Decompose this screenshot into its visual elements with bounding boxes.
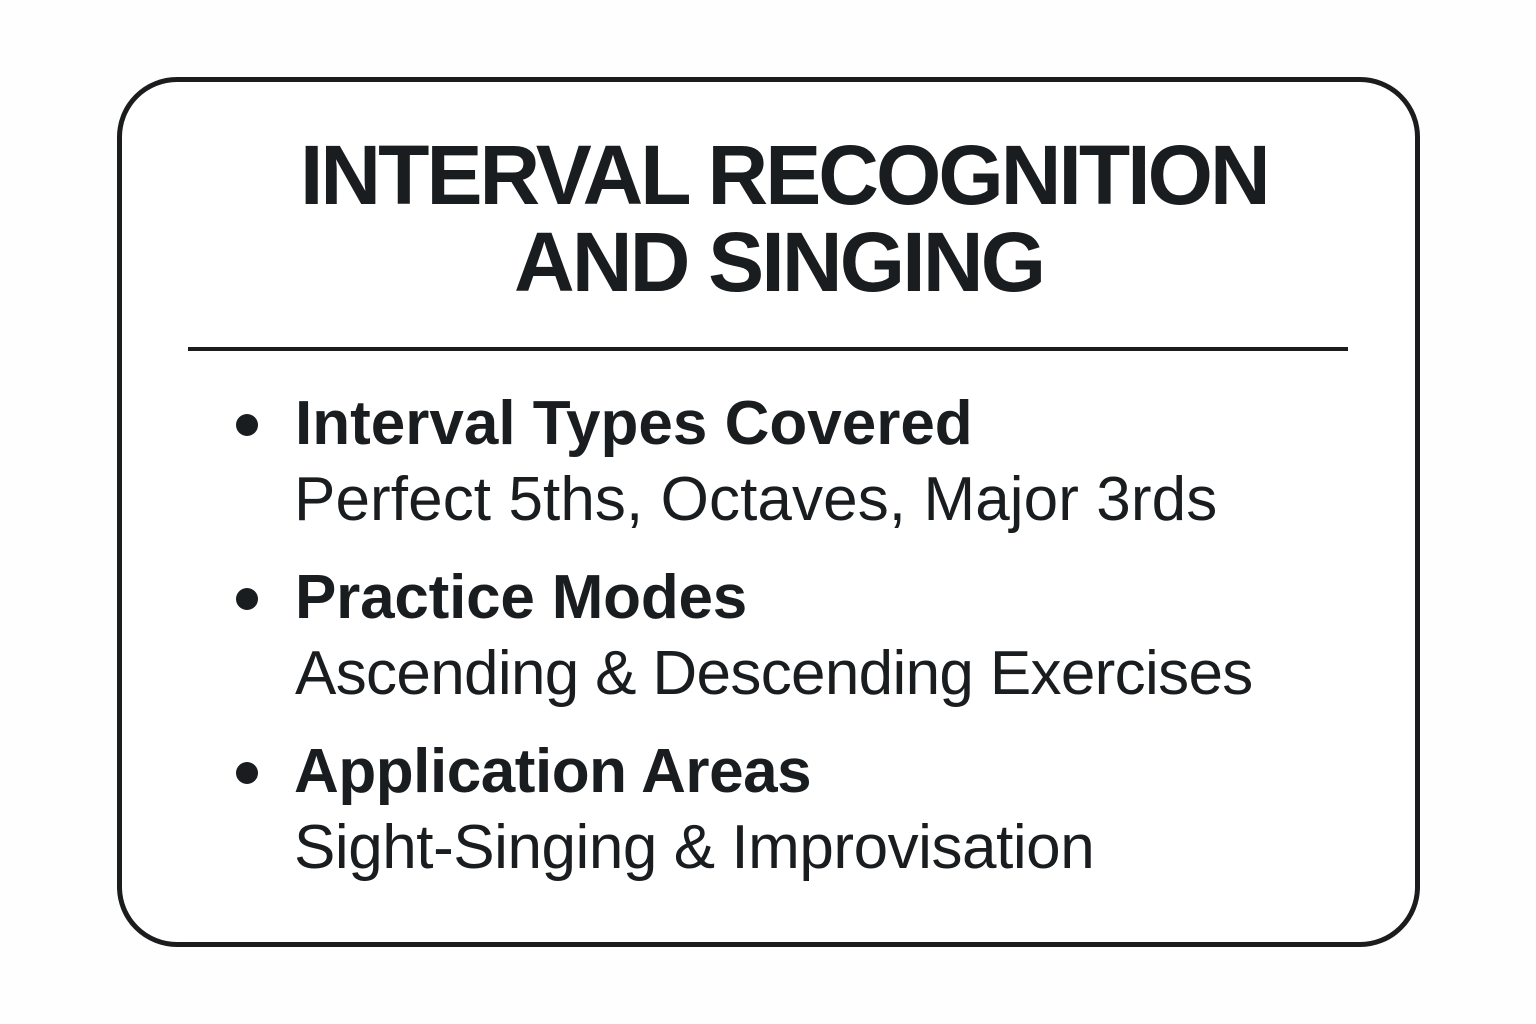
title bbox=[300, 128, 1268, 309]
bullet: interval types bbox=[236, 389, 1217, 534]
heading: practice modes: Practice Modes bbox=[295, 563, 747, 632]
text: interval types: Perfect 5ths, Octaves, Major 3rds bbox=[294, 465, 1217, 534]
bullet: application areas bbox=[236, 737, 1094, 882]
title line 2: AND SINGING bbox=[514, 215, 1043, 309]
text: practice modes: Ascending & Descending Exercises bbox=[295, 639, 1253, 708]
divider bbox=[188, 347, 1348, 351]
panel: main card bbox=[117, 77, 1420, 947]
title line 1: INTERVAL RECOGNITION bbox=[300, 128, 1268, 222]
text: application areas: Sight-Singing & Improvisation bbox=[294, 813, 1094, 882]
heading: interval types covered: Interval Types Covered bbox=[295, 389, 973, 458]
bullet: practice modes bbox=[236, 563, 1253, 708]
icon: bullet dot bbox=[236, 762, 258, 784]
icon: bullet dot bbox=[236, 414, 258, 436]
icon: bullet dot bbox=[236, 588, 258, 610]
heading: application areas: Application Areas bbox=[294, 737, 811, 806]
